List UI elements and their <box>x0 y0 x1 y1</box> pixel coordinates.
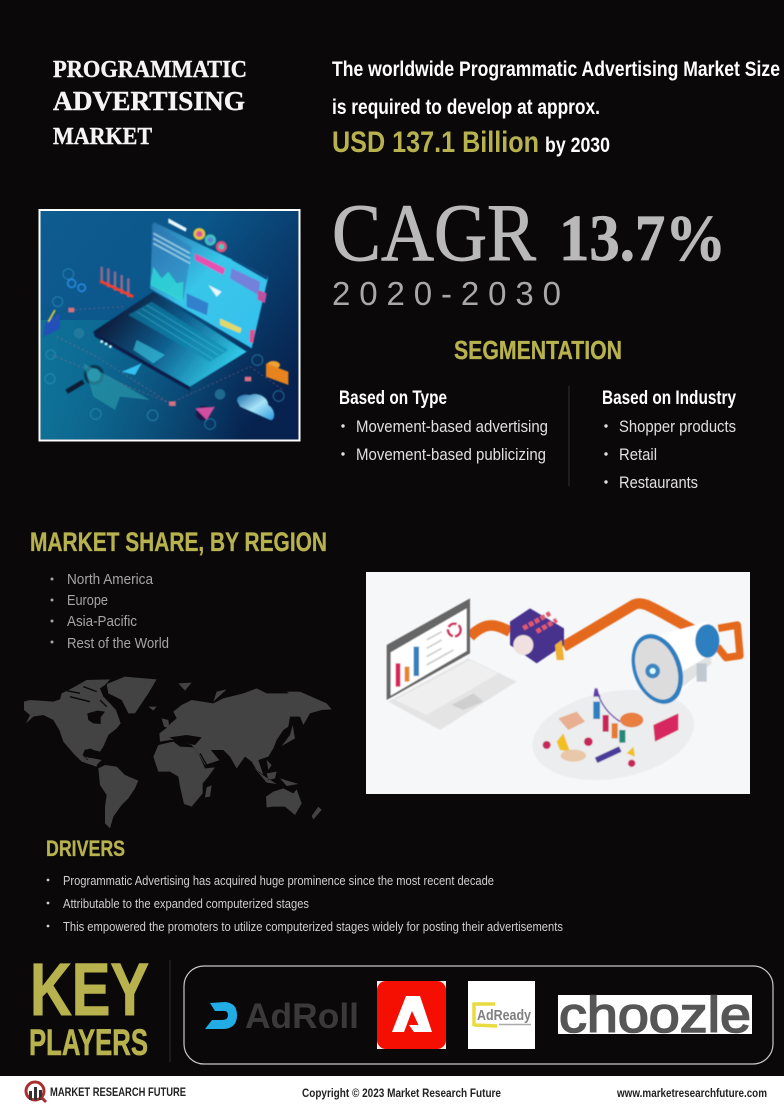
region list: Asia-Pacific <box>67 613 137 630</box>
world map <box>24 677 332 828</box>
drivers list: Attributable to the expanded computerized stages <box>63 896 309 911</box>
key players logo panel <box>184 966 773 1064</box>
title: PROGRAMMATIC <box>53 57 247 83</box>
market size statement: is required to develop at approx. <box>332 96 600 119</box>
drivers list: Programmatic Advertising has acquired huge prominence since the most recent decade <box>63 873 494 888</box>
segmentation: based on type: Based on Type <box>339 388 447 409</box>
segmentation: based on type <box>339 388 548 464</box>
heading: segmentation: SEGMENTATION <box>454 335 622 365</box>
footer: Copyright © 2023 Market Research Future <box>302 1086 501 1100</box>
footer <box>0 1076 784 1108</box>
segmentation: based on type: Movement-based publicizing <box>356 445 546 464</box>
title: ADVERTISING <box>53 86 245 116</box>
heading: key players: KEY <box>30 948 149 1031</box>
segmentation: based on type: Movement-based advertising <box>356 417 548 436</box>
market size statement <box>332 58 780 159</box>
segmentation: based on industry: Retail <box>619 445 657 464</box>
logo: Adobe <box>377 981 446 1049</box>
logo: AdReady <box>468 981 535 1049</box>
heading: market share by region: MARKET SHARE, BY REGION <box>30 527 327 557</box>
footer: MARKET RESEARCH FUTURE <box>50 1085 186 1099</box>
heading: drivers: DRIVERS <box>46 836 125 861</box>
region list: North America <box>67 571 154 588</box>
market size statement: USD 137.1 Billion <box>332 126 539 159</box>
icon: Market Research Future logo <box>26 1082 46 1102</box>
logo: AdRoll: AdRoll <box>245 997 359 1036</box>
market size statement: by 2030 <box>545 134 610 157</box>
logo: AdReady: AdReady <box>477 1007 532 1024</box>
CAGR figure <box>332 187 726 312</box>
segmentation: based on industry: Restaurants <box>619 473 698 492</box>
CAGR figure: 13.7% <box>559 202 726 275</box>
heading: key players <box>29 948 149 1063</box>
CAGR figure: 2020-2030 <box>332 275 561 312</box>
illustration: laptop with data dashboards <box>40 210 300 440</box>
illustration: laptop connected to megaphone <box>366 572 750 794</box>
segmentation: based on industry: Shopper products <box>619 417 736 436</box>
region list: Europe <box>67 592 108 609</box>
heading: key players: PLAYERS <box>29 1022 148 1063</box>
logo: choozle: choozle <box>559 987 751 1043</box>
title <box>53 57 247 150</box>
title: MARKET <box>53 124 152 150</box>
drivers list <box>47 873 563 934</box>
region list: Rest of the World <box>67 635 169 652</box>
region list <box>50 571 169 652</box>
segmentation: based on industry <box>602 388 736 492</box>
segmentation: based on industry: Based on Industry <box>602 388 736 409</box>
CAGR figure: CAGR <box>332 187 536 278</box>
drivers list: This empowered the promoters to utilize computerized stages widely for posting their advertisements <box>63 919 563 934</box>
